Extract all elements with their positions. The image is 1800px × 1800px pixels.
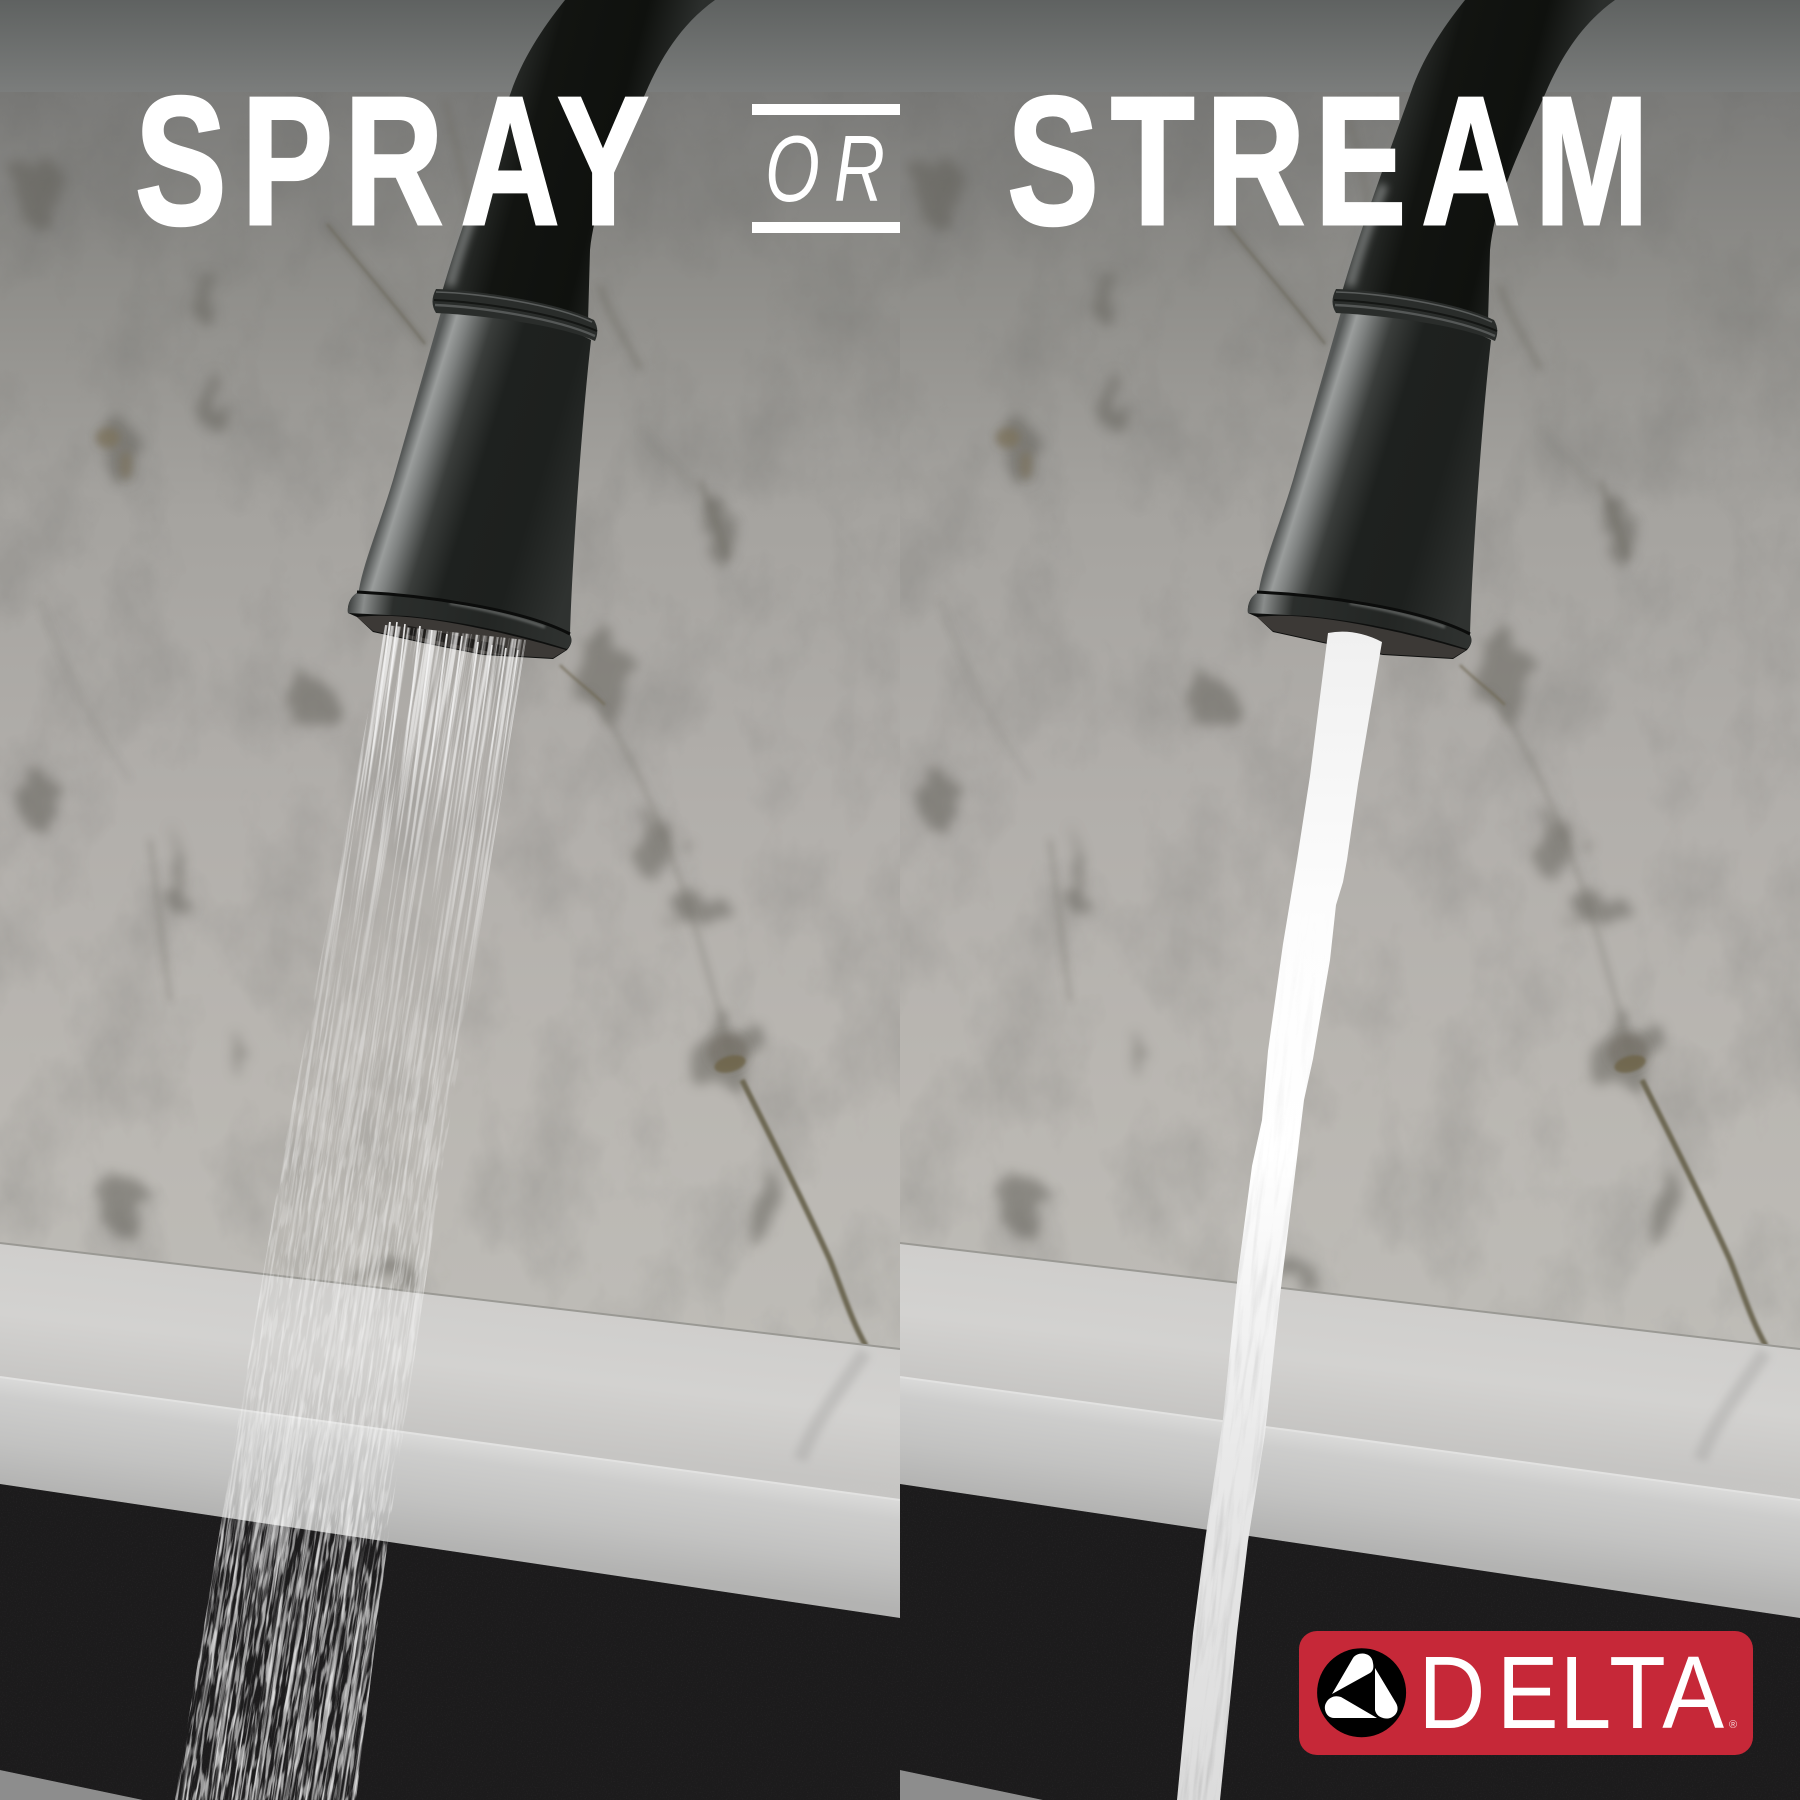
water: spray <box>175 622 526 1800</box>
top grey band: right panel <box>900 0 1800 92</box>
stream body <box>1177 632 1382 1800</box>
faucet: spray side <box>348 0 715 659</box>
title word: SPRAY: SPRAY <box>135 60 649 264</box>
water: stream <box>1177 632 1382 1800</box>
spray water streaks <box>175 625 526 1800</box>
icon: Delta tri-drop mark <box>1317 1648 1406 1737</box>
panel: stream backdrop (marble wall, counter, sink) <box>840 40 1800 1800</box>
logo wordmark: DELTA <box>1418 1634 1725 1750</box>
title word: STREAM: STREAM <box>1007 60 1649 264</box>
logo: Delta badge <box>1299 1631 1753 1755</box>
stream texture <box>1180 1098 1290 1800</box>
connector word: OR with rules <box>752 104 900 233</box>
top grey band: left panel <box>0 0 900 92</box>
spray top filaments <box>362 622 518 830</box>
spray nozzle holes <box>407 630 517 653</box>
faucet: stream side <box>1248 0 1615 659</box>
registered mark: ® <box>1729 1719 1737 1731</box>
connector word: OR with rules: OR <box>765 116 885 221</box>
panel: spray backdrop (marble wall, counter, sink) <box>0 40 960 1800</box>
title <box>135 60 1649 264</box>
